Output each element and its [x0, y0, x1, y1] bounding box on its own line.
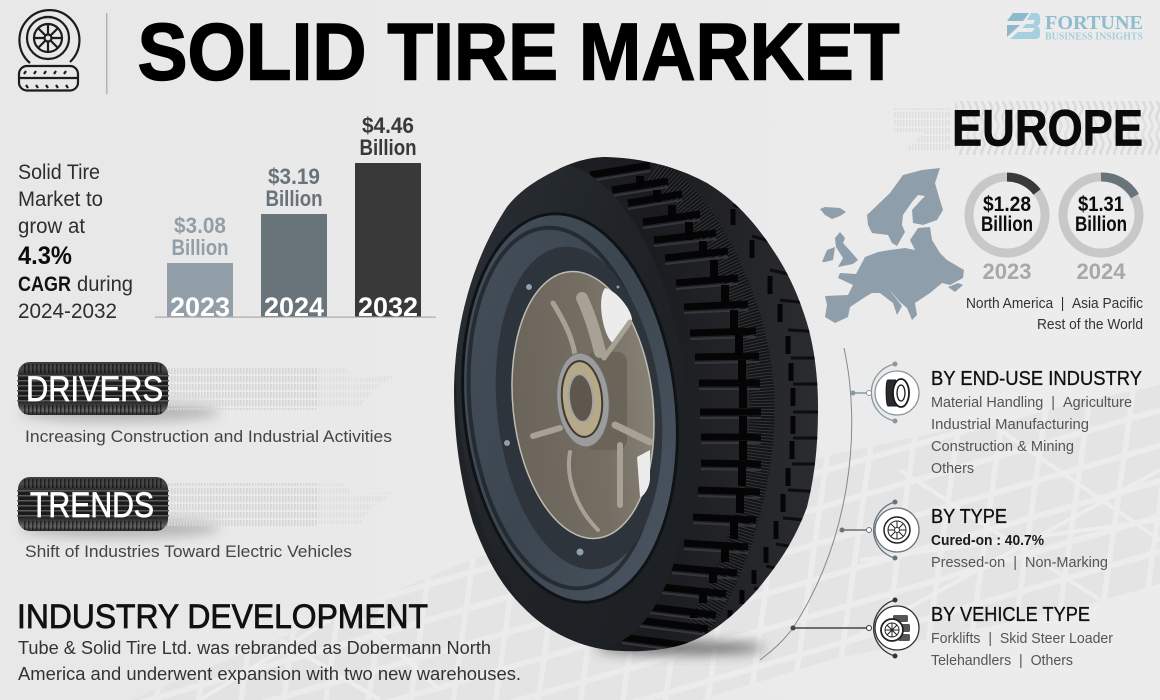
donut 2024: $1.31 [1078, 193, 1124, 216]
donut 2023: 2023 [983, 259, 1031, 284]
wheel hub [499, 264, 667, 546]
bar 2024: $3.19 [268, 164, 320, 189]
bar 2032: Billion [360, 135, 416, 160]
panel: drivers [17, 362, 395, 446]
panel: industry development [17, 598, 521, 684]
donut 2023: $1.28 [983, 193, 1031, 216]
segment connector curve [760, 348, 852, 660]
donut 2024: Billion [1075, 213, 1127, 236]
panel: by vehicle type: Forklifts | Skid Steer Loader [931, 630, 1113, 647]
panel: growth summary: 2024-2032 [18, 300, 117, 323]
panel: by end-use industry: Industrial Manufacturing [931, 416, 1089, 433]
donut 2024 [1063, 177, 1139, 284]
other regions [966, 295, 1143, 333]
panel: growth summary: during [77, 273, 133, 296]
logo: Fortune Business Insights [1007, 12, 1143, 42]
panel: growth summary: grow at [18, 215, 85, 238]
panel: by type: Pressed-on | Non-Marking [931, 554, 1108, 571]
badge: trends: TRENDS [30, 486, 154, 525]
bar 2023: $3.08 [174, 213, 226, 238]
header divider [106, 13, 108, 94]
badge: drivers [17, 362, 169, 415]
map: Europe [820, 168, 964, 323]
donut 2024: 2024 [1077, 259, 1126, 284]
tread [590, 165, 825, 652]
icon: tire header [19, 10, 79, 91]
panel: growth summary: Market to [18, 188, 103, 211]
panel: industry development: Tube & Solid Tire Ltd. was rebranded as Dobermann North [18, 638, 491, 658]
donut 2023 [969, 177, 1045, 284]
panel: by vehicle type [790, 598, 1113, 669]
flange [444, 203, 696, 613]
bearing [553, 351, 613, 449]
bolts [504, 284, 620, 556]
panel: by vehicle type: Telehandlers | Others [931, 652, 1073, 669]
drivers text: Increasing Construction and Industrial Activities [25, 427, 392, 446]
sidewall [456, 165, 674, 648]
icon: tire stack [790, 598, 919, 658]
trends text: Shift of Industries Toward Electric Vehicles [25, 542, 352, 561]
bar 2032 [355, 113, 421, 322]
panel: by end-use industry: Others [931, 460, 974, 477]
panel: by end-use industry [850, 362, 1142, 477]
title: SOLID TIRE MARKET [138, 8, 900, 98]
other regions: Rest of the World [1037, 316, 1143, 333]
logo: Fortune Business Insights: BUSINESS INSIGHTS [1045, 32, 1143, 42]
bar 2032: 2032 [358, 292, 418, 322]
panel: by end-use industry: BY END-USE INDUSTRY [931, 368, 1142, 390]
badge: drivers: DRIVERS [26, 370, 163, 409]
bar 2024: 2024 [264, 292, 324, 322]
bar 2023: Billion [172, 235, 228, 260]
panel: by type: BY TYPE [931, 506, 1007, 528]
panel: by vehicle type: BY VEHICLE TYPE [931, 604, 1090, 626]
panel: by end-use industry: Construction & Mining [931, 438, 1074, 455]
icon: tire side view [850, 362, 919, 424]
panel: Europe [820, 100, 1160, 333]
panel: growth summary [18, 161, 133, 323]
badge: trends [17, 477, 169, 531]
bar 2024 [261, 164, 327, 322]
panel: growth summary: CAGR [18, 273, 71, 296]
other regions: North America | Asia Pacific [966, 295, 1143, 312]
bar chart: market size [155, 113, 436, 322]
panel: by end-use industry: Material Handling | Agriculture [931, 394, 1132, 411]
icon: wheel [840, 500, 919, 560]
panel: trends [17, 477, 395, 561]
image: solid tire [433, 151, 825, 661]
panel: by type [840, 500, 1108, 571]
donut 2023: Billion [981, 213, 1033, 236]
logo: Fortune Business Insights: FORTUNE [1045, 12, 1143, 34]
panel: industry development: INDUSTRY DEVELOPMENT [17, 598, 428, 636]
panel: growth summary: Solid Tire [18, 161, 100, 184]
bar 2024: Billion [266, 186, 322, 211]
bar 2023 [167, 213, 233, 322]
panel: industry development: America and underwent expansion with two new warehouses. [18, 664, 521, 684]
panel: by type: Cured-on : 40.7% [931, 533, 1044, 549]
tread texture background [130, 385, 1160, 700]
panel: growth summary: 4.3% [18, 242, 72, 270]
bar 2032: $4.46 [362, 113, 414, 138]
bar 2023: 2023 [170, 292, 230, 322]
tread strip behind heading [893, 101, 1160, 155]
